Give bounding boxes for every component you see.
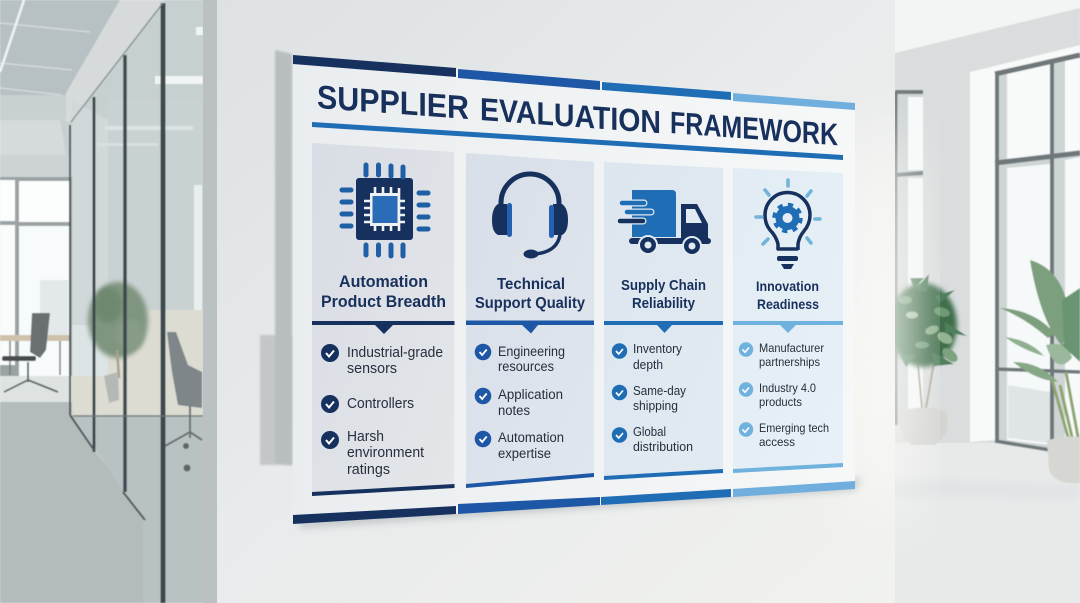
left potted plant — [889, 274, 967, 445]
bottom colour bar — [293, 481, 855, 524]
header bar — [312, 321, 454, 334]
checklist: environment — [347, 445, 424, 461]
checklist: Automation — [498, 430, 564, 445]
title: SUPPLIER — [317, 79, 469, 127]
checklist: Industry 4.0 — [759, 381, 816, 395]
panel: Automation Product Breadth — [312, 143, 454, 496]
right window — [995, 54, 1080, 458]
footer bar — [733, 463, 843, 473]
panel: Supply Chain Reliability — [604, 162, 723, 480]
header bar — [604, 321, 723, 333]
checklist: Emerging tech — [759, 421, 829, 435]
room behind the glass — [108, 100, 203, 325]
checklist — [612, 342, 693, 454]
checklist: Engineering — [498, 344, 565, 359]
heading — [621, 277, 706, 312]
checklist: sensors — [347, 361, 397, 377]
heading: Readiness — [757, 296, 819, 312]
heading — [475, 276, 585, 312]
icon: light bulb with gear — [756, 180, 820, 269]
heading: Automation — [339, 272, 428, 291]
panel: Innovation Readiness — [733, 168, 843, 473]
title rule — [312, 122, 843, 160]
signage board — [275, 50, 855, 524]
title — [317, 79, 838, 152]
checklist — [739, 341, 829, 449]
heading: Support Quality — [475, 295, 585, 312]
checklist: Controllers — [347, 396, 414, 412]
footer bar — [312, 484, 454, 496]
heading: Technical — [497, 276, 565, 293]
checklist: distribution — [633, 440, 693, 454]
checklist: partnerships — [759, 355, 820, 369]
icon: processor chip — [342, 165, 428, 256]
title: FRAMEWORK — [670, 105, 838, 152]
heading: Supply Chain — [621, 277, 706, 294]
background: main wall — [203, 0, 910, 603]
checklist: expertise — [498, 446, 551, 461]
table and chair — [0, 335, 70, 341]
header bar — [733, 321, 843, 333]
board drop shadow — [260, 335, 862, 528]
office chair — [165, 332, 202, 472]
checklist: access — [759, 435, 795, 449]
heading: Innovation — [756, 278, 819, 294]
heading — [321, 272, 446, 311]
checklist: Manufacturer — [759, 341, 824, 355]
potted plant behind glass — [88, 282, 148, 403]
checklist: products — [759, 395, 802, 409]
footer bar — [604, 469, 723, 480]
icon: headset — [492, 174, 568, 258]
checklist — [475, 344, 565, 461]
right potted plant — [1000, 260, 1080, 483]
checklist: Industrial-grade — [347, 345, 443, 361]
footer bar — [466, 473, 594, 488]
heading: Product Breadth — [321, 292, 446, 311]
checklist: Inventory — [633, 342, 683, 356]
checklist: Same-day — [633, 384, 687, 398]
heading: Reliability — [632, 295, 696, 312]
checklist — [321, 344, 443, 478]
checklist: depth — [633, 358, 663, 372]
left window — [895, 92, 923, 425]
checklist: ratings — [347, 462, 390, 478]
checklist: Harsh — [347, 429, 384, 445]
icon: delivery truck — [620, 190, 711, 255]
distant window — [0, 177, 108, 403]
checklist: Application — [498, 387, 563, 402]
glass wall frames — [69, 125, 71, 415]
top colour bar — [293, 55, 855, 110]
heading — [756, 278, 819, 312]
panel: Technical Support Quality — [466, 153, 594, 488]
title: EVALUATION — [480, 91, 661, 140]
checklist: resources — [498, 359, 554, 374]
checklist: shipping — [633, 399, 678, 413]
checklist: Global — [633, 425, 666, 439]
background: right side room with windows and plants — [889, 0, 1080, 603]
checklist: notes — [498, 403, 530, 418]
background: left office with glass wall — [0, 0, 205, 603]
floor — [0, 400, 145, 603]
header bar — [466, 320, 594, 334]
